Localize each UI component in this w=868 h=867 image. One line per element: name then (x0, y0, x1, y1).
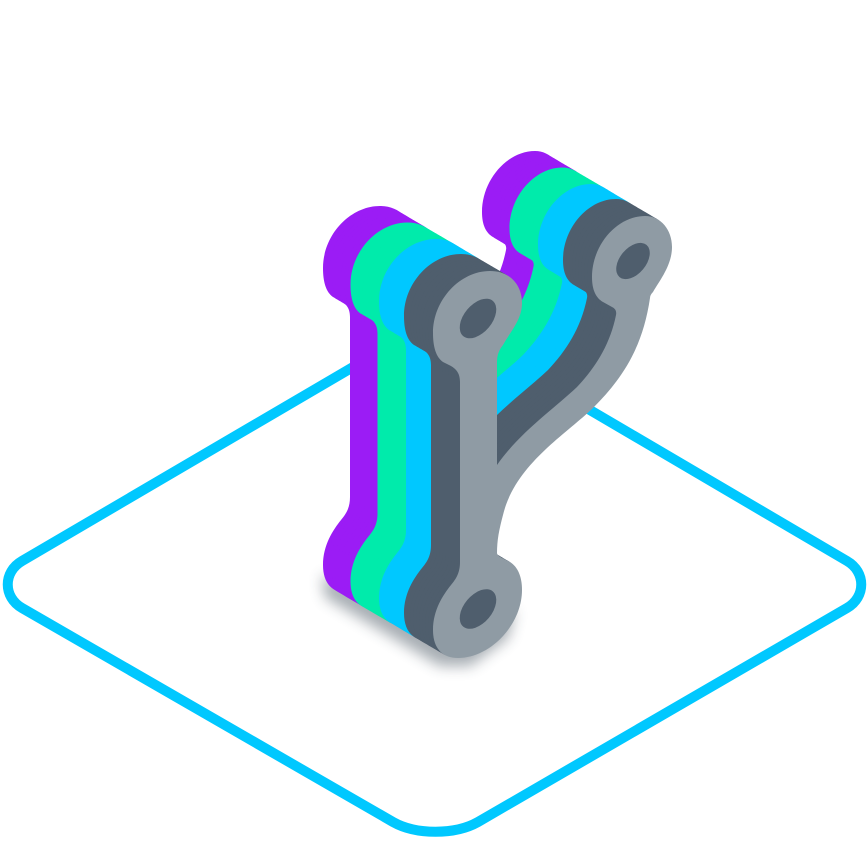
drop shadow (322, 575, 515, 666)
extrusion layer: purple (323, 151, 589, 609)
platform outline (8, 319, 861, 832)
extrusion layer: dark slate (404, 199, 670, 657)
extrusion layer: blue (379, 184, 642, 640)
branch icon front face (433, 216, 672, 658)
extrusion layer: green (350, 168, 616, 625)
holes (452, 237, 656, 636)
